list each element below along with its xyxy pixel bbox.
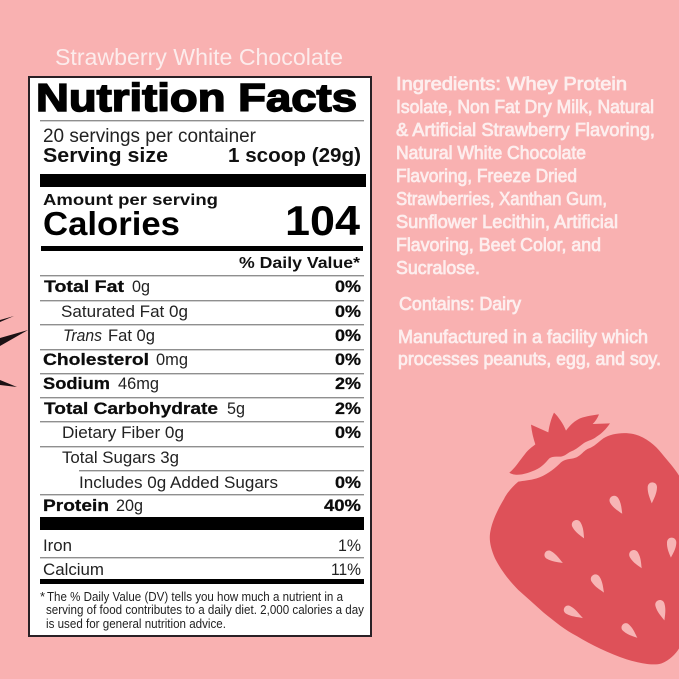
trans fat row: 0% [335,327,361,345]
daily value header: % Daily Value* [239,255,361,272]
nutrient rows [40,277,364,515]
calories block: Calories [43,205,180,242]
icon: dark leaf spikes at left edge [0,316,28,387]
text block: ingredients: Sunflower Lecithin, Artificial [396,212,618,232]
text block: ingredients [396,74,655,278]
calcium row: Calcium [43,560,104,579]
text block: ingredients: Ingredients: Whey Protein [396,74,627,94]
sodium row: 46mg [118,374,159,393]
calories block [43,192,361,244]
text block: facility statement: Manufactured in a facility which [398,327,648,347]
dietary fiber row: Dietary Fiber 0g [62,423,184,442]
cholesterol row [43,350,361,369]
panel: nutrition facts label [29,77,371,636]
text block: ingredients: & Artificial Strawberry Flavoring, [396,120,655,140]
strawberry body [490,433,679,664]
text block: allergen contains: Contains: Dairy [399,294,521,314]
iron row: Iron [43,536,72,555]
added sugars row: 0% [335,474,361,492]
servings block: 20 servings per container [43,125,256,147]
sodium row: 2% [335,375,361,393]
protein row: 20g [116,496,143,515]
total fat row: Total Fat [44,278,125,296]
text block: ingredients: Flavoring, Beet Color, and [396,235,601,255]
calories block: Amount per serving [43,192,218,209]
iron row: 1% [338,536,361,555]
icon: strawberry illustration [490,413,679,664]
trans fat row: Trans [63,326,102,345]
strawberry leaves [509,413,610,475]
sodium row [43,374,361,393]
calories block: 104 [285,197,361,244]
text block: ingredients: Strawberries, Xanthan Gum, [396,189,607,209]
protein row: Protein [43,497,109,515]
protein row: 40% [324,497,361,515]
footnote: serving of food contributes to a daily diet. 2,000 calories a day [46,602,364,617]
footnote [40,589,364,631]
footnote: The % Daily Value (DV) tells you how much a nutrient in a [47,589,344,604]
calcium row [43,560,361,579]
flavor title: Strawberry White Chocolate [55,44,343,70]
text block: ingredients: Isolate, Non Fat Dry Milk, Natural [396,97,654,117]
total carbohydrate row: 2% [335,400,361,418]
text block: facility statement: processes peanuts, egg, and soy. [398,349,661,369]
cholesterol row: Cholesterol [43,351,149,369]
protein row [43,496,361,515]
dietary fiber row: 0% [335,424,361,442]
text block: ingredients: Sucralose. [396,258,480,278]
servings block [43,125,361,167]
footnote: * [40,589,45,604]
trans fat row [63,326,361,345]
servings block: 1 scoop (29g) [228,145,361,167]
total carbohydrate row [44,399,361,418]
added sugars row: Includes 0g Added Sugars [79,473,278,492]
strawberry seeds [543,482,677,641]
calcium row: 11% [331,560,361,579]
cholesterol row: 0% [335,351,361,369]
saturated fat row [61,302,361,321]
total carbohydrate row: Total Carbohydrate [44,400,218,418]
total fat row [44,277,361,296]
total fat row: 0% [335,278,361,296]
total fat row: 0g [132,277,150,296]
saturated fat row: Saturated Fat 0g [61,302,188,321]
trans fat row: Fat 0g [108,326,155,345]
text block: facility statement [398,327,661,369]
text block: ingredients: Natural White Chocolate [396,143,586,163]
text block: ingredients: Flavoring, Freeze Dried [396,166,577,186]
servings block: Serving size [43,145,168,167]
cholesterol row: 0mg [156,350,188,369]
iron row [43,536,361,555]
saturated fat row: 0% [335,303,361,321]
dietary fiber row [62,423,361,442]
sodium row: Sodium [43,375,110,393]
total carbohydrate row: 5g [227,399,245,418]
heading: Nutrition Facts: Nutrition Facts [36,77,357,120]
footnote: is used for general nutrition advice. [46,616,226,631]
total sugars row: Total Sugars 3g [62,448,179,467]
